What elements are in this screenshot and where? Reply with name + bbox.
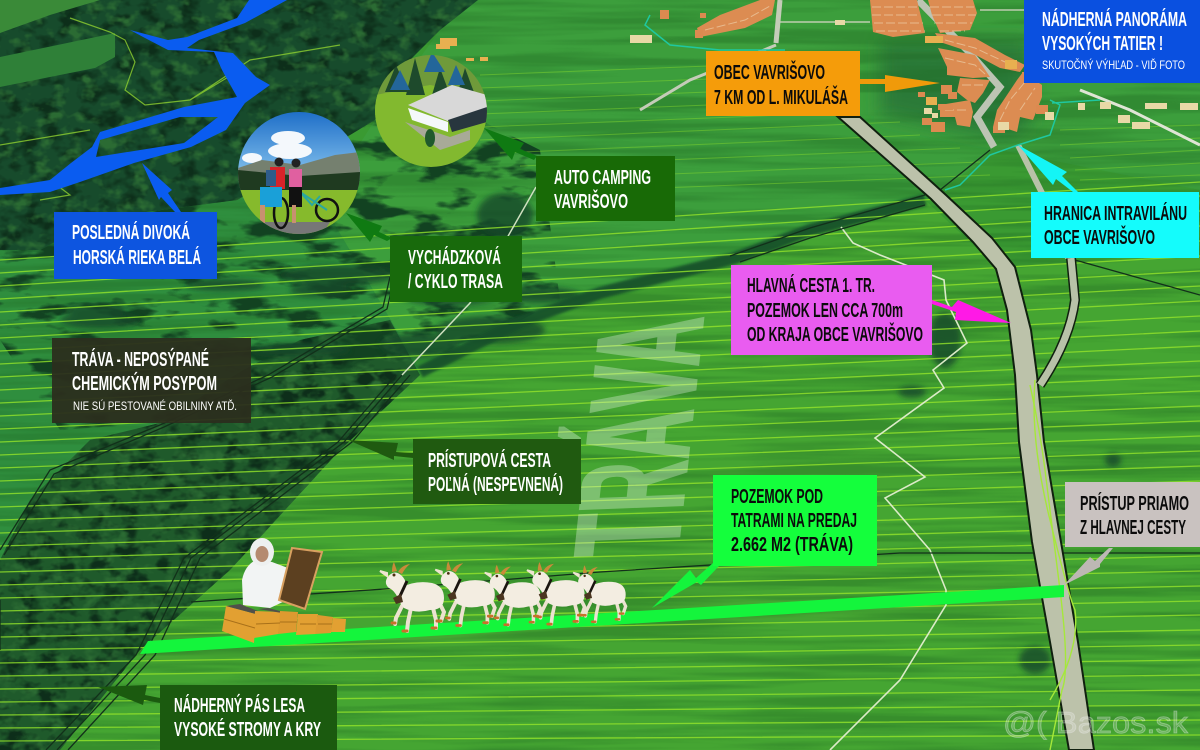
text box: grass without chemicals: CHEMICKÝM POSYPOM bbox=[72, 371, 217, 395]
callout: village boundary bbox=[1018, 145, 1199, 258]
rider right bbox=[289, 158, 302, 223]
dense roofs bbox=[697, 0, 1042, 133]
goat 3 bbox=[485, 565, 540, 625]
label: VYCHÁDZKOVÁ bbox=[408, 246, 501, 269]
photo: cyclists bbox=[238, 112, 360, 235]
label: NÁDHERNÝ PÁS LESA bbox=[174, 693, 305, 717]
side roads bbox=[640, 0, 1200, 750]
light side road bbox=[402, 187, 536, 375]
text box: grass without chemicals bbox=[52, 338, 251, 423]
callout: Tatra panorama bbox=[1024, 0, 1200, 83]
label: AUTO CAMPING bbox=[554, 167, 651, 189]
callout: access field road: POĽNÁ (NESPEVNENÁ) bbox=[428, 473, 563, 496]
background trees bbox=[375, 55, 487, 115]
callout: forest strip: VYSOKÉ STROMY A KRY bbox=[174, 718, 321, 741]
individual houses bbox=[660, 10, 1048, 132]
callout: walking and cycling trail: / CYKLO TRASA bbox=[408, 271, 503, 293]
arrow bbox=[484, 128, 537, 160]
box bbox=[160, 685, 337, 750]
upper fields bbox=[260, 0, 1200, 370]
arrow bbox=[652, 563, 719, 608]
river Belá bbox=[0, 0, 287, 195]
honey frame bbox=[279, 548, 322, 609]
arrow bbox=[142, 163, 181, 212]
label: HLAVNÁ CESTA 1. TR. bbox=[747, 274, 875, 297]
callout: access field road bbox=[348, 439, 581, 504]
arrow bbox=[98, 685, 160, 705]
dark tree patches in meadows bbox=[0, 120, 560, 430]
box bbox=[713, 475, 877, 566]
village Vavrišovo buildings bbox=[436, 0, 1198, 133]
blue tents bbox=[390, 52, 465, 90]
box bbox=[1065, 482, 1200, 547]
plot strip bbox=[140, 585, 1064, 654]
white stream bbox=[830, 227, 967, 750]
callout: direct access from main road bbox=[1064, 482, 1200, 585]
label: POZEMOK POD bbox=[731, 486, 823, 508]
box bbox=[54, 212, 217, 279]
meadow west bbox=[0, 33, 115, 87]
bike frame bbox=[300, 192, 327, 210]
goat 2 bbox=[435, 561, 495, 625]
box bbox=[706, 51, 860, 116]
roof rows shadows bbox=[705, 6, 1035, 120]
box bbox=[731, 265, 932, 355]
clouds bbox=[242, 131, 312, 163]
callout: main road: OD KRAJA OBCE VAVRIŠOVO bbox=[747, 322, 923, 346]
hive boxes bbox=[222, 604, 346, 643]
label: PRÍSTUPOVÁ CESTA bbox=[428, 449, 551, 472]
beekeeper suit bbox=[242, 560, 288, 608]
terrace bbox=[405, 122, 470, 150]
dark road lines bbox=[0, 150, 1200, 750]
label: TRÁVA - NEPOSÝPANÉ bbox=[72, 347, 209, 371]
callout: main road: POZEMOK LEN CCA 700m bbox=[747, 300, 903, 322]
lawn bbox=[375, 85, 487, 167]
rider left bbox=[260, 158, 285, 223]
sky bbox=[238, 112, 360, 182]
arrow bbox=[348, 440, 413, 460]
box bbox=[413, 439, 581, 504]
arrow bbox=[860, 75, 940, 92]
shrub bbox=[425, 129, 435, 147]
house wall bbox=[408, 108, 448, 132]
box bbox=[536, 156, 675, 221]
lower left forest bbox=[0, 320, 420, 750]
arrow bbox=[1064, 548, 1113, 585]
callout: main road bbox=[731, 265, 1011, 355]
text box: grass without chemicals: NIE SÚ PESTOVANÉ OBILNINY ATĎ. bbox=[73, 398, 237, 413]
upper faint parcel lines bbox=[480, 60, 1200, 192]
bike wheels bbox=[274, 198, 338, 228]
beekeeper with hives bbox=[222, 538, 346, 643]
label: OBEC VAVRIŠOVO bbox=[714, 60, 825, 84]
callout: auto camping: VAVRIŠOVO bbox=[554, 189, 628, 213]
carriageway bbox=[838, 117, 1094, 750]
intravilan boundary line bbox=[645, 15, 1100, 190]
box bbox=[1024, 0, 1200, 83]
box bbox=[390, 236, 522, 302]
goat 5 bbox=[573, 565, 626, 622]
tree line bbox=[238, 170, 360, 195]
path bbox=[262, 222, 330, 235]
callout: auto camping bbox=[484, 128, 675, 221]
house side bbox=[448, 107, 487, 132]
goats bbox=[380, 561, 626, 631]
callout: plot for sale bbox=[652, 475, 877, 608]
callout: walking and cycling trail bbox=[346, 213, 522, 302]
forest trails bbox=[0, 18, 340, 200]
box bbox=[52, 338, 251, 423]
forest areas bbox=[0, 0, 478, 250]
forest tree texture bbox=[0, 0, 473, 750]
arrow bbox=[1018, 145, 1078, 192]
arrow bbox=[346, 213, 392, 242]
text: TRÁVA bbox=[544, 315, 735, 558]
watermark: @( Bazos.sk bbox=[1003, 705, 1189, 740]
dark tree clumps bbox=[60, 193, 1121, 674]
veil hood bbox=[250, 538, 274, 566]
conifers bbox=[385, 58, 475, 95]
callout: river Belá: HORSKÁ RIEKA BELÁ bbox=[73, 246, 201, 269]
callout: plot for sale: 2.662 M2 (TRÁVA) bbox=[731, 533, 853, 556]
callout: village Vavrišovo: 7 KM OD L. MIKULÁŠA bbox=[714, 85, 848, 109]
house roof bbox=[408, 85, 487, 122]
village fields bbox=[880, 40, 1030, 140]
mountains bbox=[238, 152, 360, 190]
label: POSLEDNÁ DIVOKÁ bbox=[72, 221, 190, 244]
main road bbox=[640, 0, 1200, 750]
callout: village Vavrišovo bbox=[706, 51, 940, 116]
light valley meadow north bbox=[0, 0, 100, 33]
callout: forest strip bbox=[98, 685, 337, 750]
meadow bbox=[238, 190, 360, 235]
yellow houses bbox=[436, 36, 1017, 105]
box bbox=[1031, 192, 1199, 258]
arrow bbox=[932, 300, 1011, 323]
tree line along plot edge bbox=[420, 200, 925, 372]
main plot field bbox=[60, 200, 1200, 750]
goat 1 bbox=[380, 562, 444, 631]
callout: plot for sale: TATRAMI NA PREDAJ bbox=[731, 510, 857, 532]
left meadow bbox=[0, 165, 420, 560]
callout: river Belá bbox=[54, 163, 217, 279]
pale houses bbox=[630, 20, 1198, 130]
face bbox=[256, 546, 268, 562]
cadastre parcel lines bbox=[0, 182, 1200, 741]
photo: auto camping house bbox=[375, 52, 487, 167]
goat 4 bbox=[527, 562, 585, 624]
